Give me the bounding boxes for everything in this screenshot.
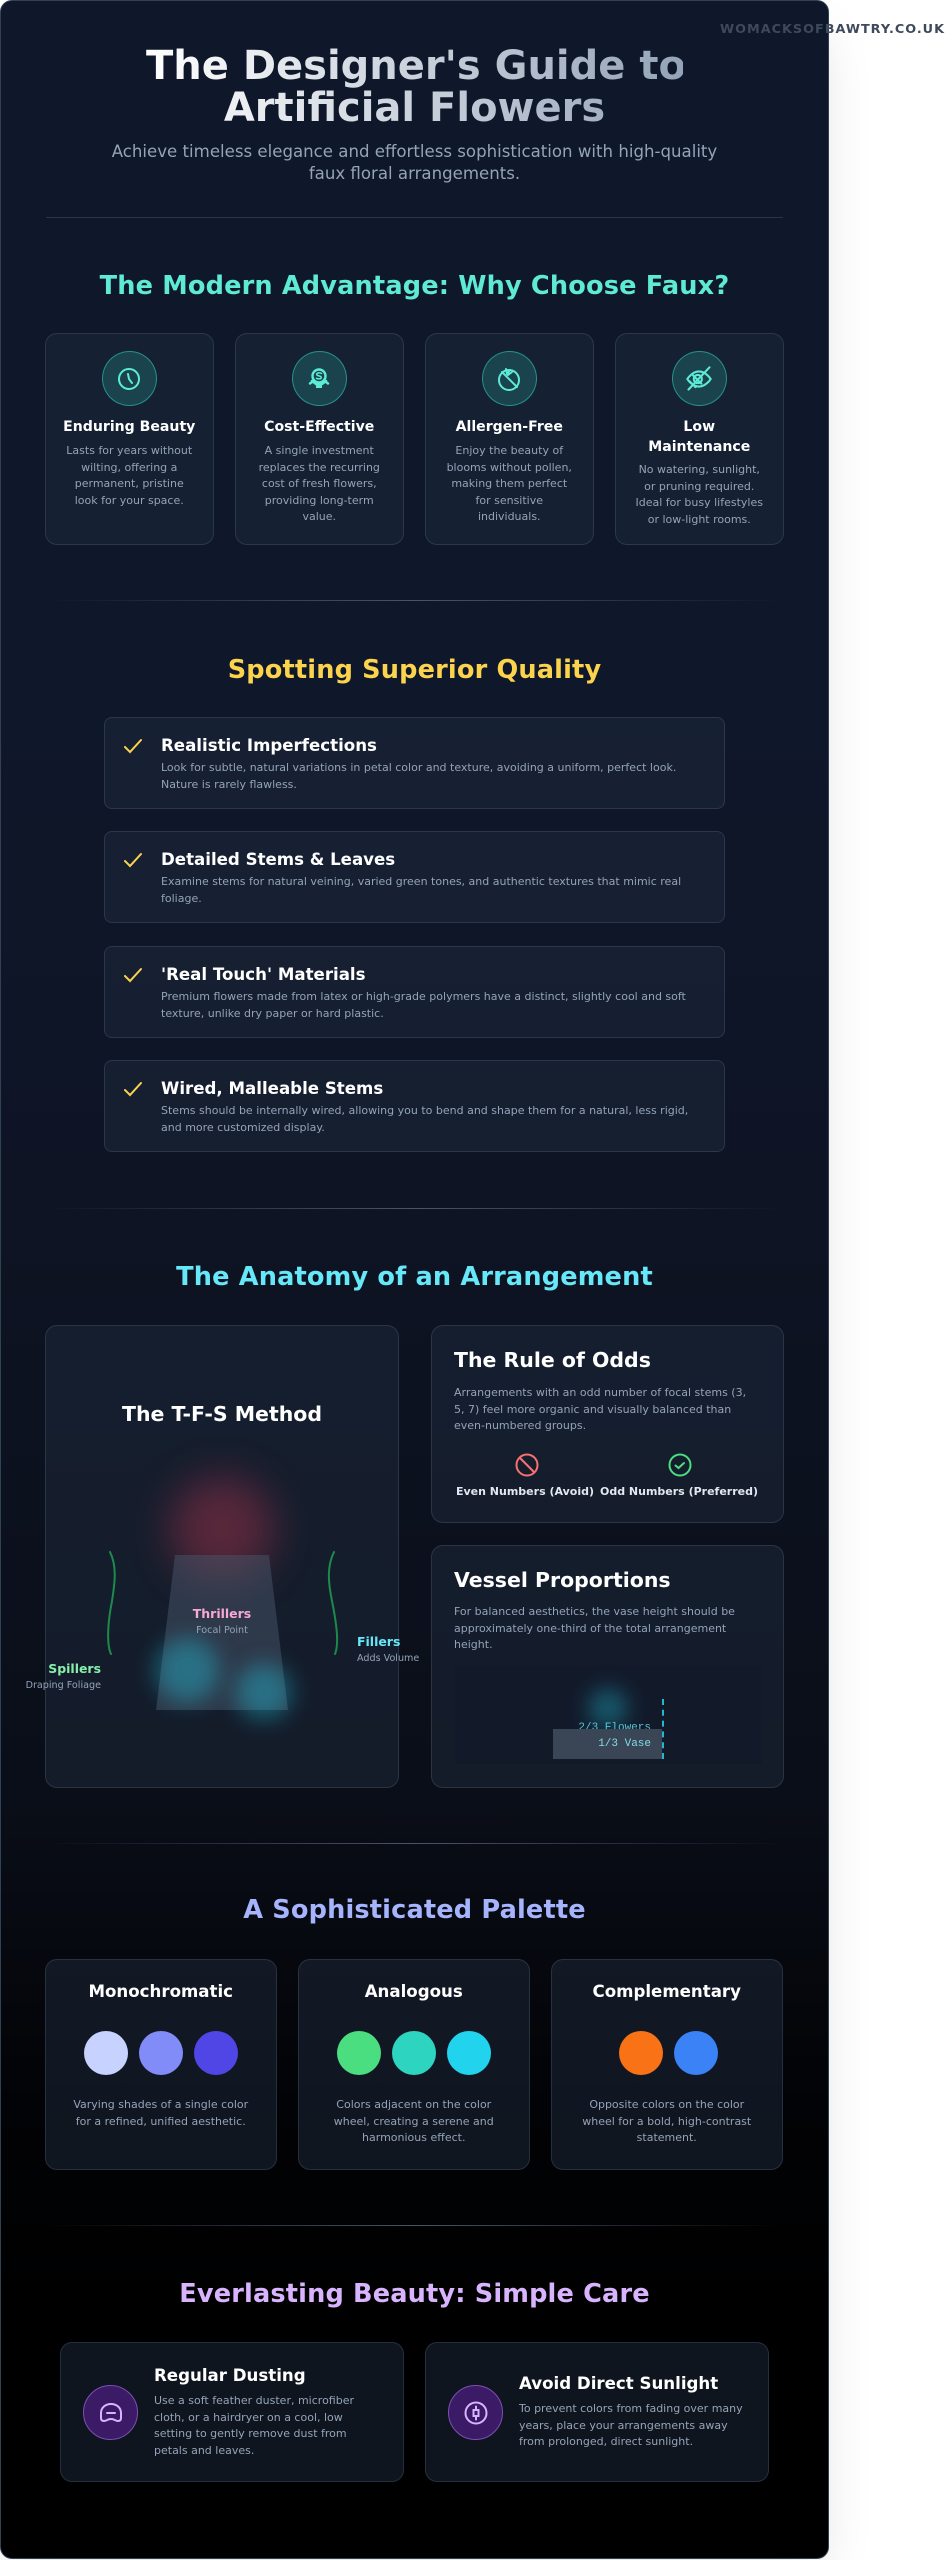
panel: cost-effective	[235, 333, 404, 545]
panel: realistic imperfections	[104, 717, 725, 809]
text	[454, 1605, 735, 1651]
panel: regular dusting: Use a soft feather duster, microfiber	[154, 2394, 354, 2407]
panel: monochromatic: Monochromatic	[88, 1982, 233, 2001]
swatches	[619, 2031, 718, 2075]
heading: anatomy: The Anatomy of an Arrangement	[176, 1262, 653, 1292]
icon: money	[292, 351, 346, 406]
label: spillers: Spillers	[48, 1661, 101, 1676]
panel: allergen-free: making them perfect	[451, 477, 567, 490]
label: odd numbers: Odd Numbers (Preferred)	[600, 1485, 758, 1498]
label: draping foliage: Draping Foliage	[26, 1680, 101, 1691]
panel: complementary: Opposite colors on the color	[589, 2098, 744, 2111]
heading: palette: A Sophisticated Palette	[243, 1895, 586, 1925]
panel: allergen-free	[425, 333, 594, 545]
panel: avoid sunlight: years, place your arrangements away	[519, 2419, 728, 2432]
heading: Vessel Proportions	[454, 1568, 671, 1592]
panel: realistic imperfections: Realistic Imperfections	[161, 736, 377, 755]
panel: enduring beauty: Enduring Beauty	[63, 419, 195, 435]
text: 5, 7) feel more organic and visually balanced than	[454, 1403, 731, 1416]
panel: rule of odds	[431, 1325, 784, 1523]
spiller stems	[107, 1551, 338, 1655]
label: flowers: 2/3 Flowers	[578, 1722, 651, 1734]
panel: low maintenance: or pruning required.	[644, 480, 754, 493]
panel: analogous: wheel, creating a serene and	[334, 2115, 494, 2128]
proportion diagram	[455, 1665, 762, 1764]
panel: monochromatic: Varying shades of a single color	[73, 2098, 248, 2111]
panel: cost-effective: replaces the recurring	[259, 461, 380, 474]
panel: avoid sunlight: To prevent colors from fading over many	[519, 2402, 743, 2415]
icon: avoid	[516, 1454, 538, 1476]
panel: real touch materials: 'Real Touch' Materials	[161, 965, 366, 984]
label: adds volume: Adds Volume	[357, 1653, 419, 1664]
title: The Designer's Guide to	[146, 43, 686, 89]
swatches	[84, 2031, 238, 2075]
text	[454, 1386, 746, 1432]
panel: real touch materials	[104, 946, 725, 1038]
watermark: WOMACKSOFBAWTRY.CO.UK	[720, 22, 945, 37]
panel: monochromatic: for a refined, unified aesthetic.	[76, 2115, 246, 2128]
panel: complementary: wheel for a bold, high-contrast	[582, 2115, 751, 2128]
panel: allergen-free: individuals.	[478, 510, 541, 523]
panel: detailed stems: Examine stems for natural veining, varied green tones, and authentic textures that mimic real	[161, 875, 681, 888]
panel: cost-effective: cost of fresh flowers,	[262, 477, 377, 490]
label: vase: 1/3 Vase	[598, 1738, 651, 1750]
panel: complementary	[551, 1959, 782, 2170]
subtitle: faux floral arrangements.	[309, 164, 520, 183]
panel: wired stems	[104, 1060, 725, 1152]
subtitle	[112, 142, 717, 183]
panel: low maintenance: No watering, sunlight,	[639, 463, 760, 476]
swatches	[337, 2031, 491, 2075]
vase	[156, 1555, 288, 1710]
flower glow	[588, 1688, 628, 1728]
panel: detailed stems: foliage.	[161, 892, 202, 904]
panel: regular dusting: petals and leaves.	[154, 2444, 254, 2457]
panel: vessel proportions	[431, 1545, 784, 1788]
panel: cost-effective: value.	[302, 510, 336, 523]
panel: detailed stems: Detailed Stems & Leaves	[161, 850, 395, 869]
panel: low maintenance: Maintenance	[648, 438, 750, 454]
measure line	[662, 1699, 664, 1759]
panel: regular dusting	[60, 2342, 404, 2482]
panel: real touch materials: Premium flowers made from latex or high-grade polymers have a distinct, slightly cool and soft	[161, 990, 686, 1003]
panel: wired stems: and more customized display.	[161, 1120, 325, 1134]
icon: no pollen	[482, 351, 536, 406]
panel: cost-effective: providing long-term	[265, 494, 374, 507]
panel: allergen-free: blooms without pollen,	[447, 461, 572, 474]
label: thrillers: Thrillers	[193, 1606, 251, 1621]
panel: regular dusting: setting to gently remove dust from	[154, 2427, 347, 2440]
icon: sun	[448, 2385, 503, 2440]
panel: avoid sunlight	[425, 2342, 768, 2482]
heading: The Rule of Odds	[454, 1348, 651, 1372]
panel: monochromatic	[45, 1959, 276, 2170]
panel: regular dusting: cloth, or a hairdryer on a cool, low	[154, 2411, 343, 2424]
panel: analogous: Analogous	[365, 1982, 463, 2001]
icon: check	[124, 968, 142, 982]
panel: realistic imperfections: Look for subtle, natural variations in petal color and texture, avoiding a uniform, perfect look.	[161, 761, 676, 774]
panel: detailed stems	[104, 831, 725, 923]
heading: spotting superior quality: Spotting Superior Quality	[228, 655, 601, 685]
panel: analogous: Colors adjacent on the color	[336, 2098, 491, 2111]
panel: enduring beauty: wilting, offering a	[81, 461, 177, 474]
panel: wired stems: Stems should be internally wired, allowing you to bend and shape them for a natural, less rigid,	[161, 1104, 688, 1117]
icon: check	[124, 1082, 142, 1096]
panel: analogous	[298, 1959, 530, 2170]
panel: real touch materials: texture, unlike dry paper or hard plastic.	[161, 1006, 384, 1020]
panel: T-F-S method	[45, 1325, 399, 1788]
icon: clock	[102, 351, 156, 406]
icon: eye slash	[672, 351, 726, 406]
text: height.	[454, 1638, 493, 1651]
filler glow right	[236, 1664, 292, 1720]
heading: care: Everlasting Beauty: Simple Care	[179, 2279, 650, 2309]
panel: analogous: harmonious effect.	[362, 2131, 465, 2144]
panel: avoid sunlight: Avoid Direct Sunlight	[519, 2374, 718, 2393]
subtitle: Achieve timeless elegance and effortless sophistication with high-quality	[112, 142, 717, 161]
text: For balanced aesthetics, the vase height should be	[454, 1605, 735, 1618]
icon: preferred	[668, 1454, 692, 1476]
panel: cost-effective: Cost-Effective	[264, 419, 374, 435]
panel: complementary: Complementary	[593, 1982, 741, 2001]
text: even-numbered groups.	[454, 1419, 586, 1432]
icon: duster	[83, 2385, 138, 2440]
panel: complementary: statement.	[637, 2131, 697, 2144]
panel: wired stems: Wired, Malleable Stems	[161, 1079, 383, 1098]
title: Artificial Flowers	[224, 85, 605, 131]
panel: low maintenance: or low-light rooms.	[648, 513, 751, 526]
panel: allergen-free: Enjoy the beauty of	[455, 444, 563, 457]
panel: enduring beauty: look for your space.	[75, 494, 184, 507]
panel: low maintenance	[615, 333, 784, 545]
panel: avoid sunlight: from prolonged, direct sunlight.	[519, 2435, 693, 2448]
panel: realistic imperfections: Nature is rarely flawless.	[161, 778, 297, 790]
filler glow left	[155, 1638, 219, 1702]
panel: enduring beauty: permanent, pristine	[75, 477, 184, 490]
heading: modern advantage: The Modern Advantage: Why Choose Faux?	[100, 271, 729, 301]
panel: cost-effective: A single investment	[265, 444, 374, 457]
thrillers glow	[170, 1477, 274, 1581]
text: Arrangements with an odd number of focal stems (3,	[454, 1386, 746, 1399]
panel: allergen-free: for sensitive	[475, 494, 543, 507]
panel: low maintenance: Low	[683, 419, 715, 435]
icon: check	[124, 853, 142, 868]
panel: low maintenance: Ideal for busy lifestyles	[636, 496, 763, 509]
label: focal point: Focal Point	[196, 1625, 248, 1636]
icon: check	[124, 739, 142, 754]
panel: regular dusting: Regular Dusting	[154, 2366, 306, 2385]
title	[146, 46, 683, 129]
vase block	[553, 1729, 662, 1759]
label: even numbers: Even Numbers (Avoid)	[456, 1485, 594, 1498]
panel: enduring beauty: Lasts for years without	[66, 444, 192, 457]
label: fillers: Fillers	[357, 1634, 400, 1649]
panel: allergen-free: Allergen-Free	[456, 419, 563, 435]
panel: enduring beauty	[45, 333, 214, 545]
text: approximately one-third of the total arrangement	[454, 1622, 726, 1635]
heading: T-F-S: The T-F-S Method	[122, 1402, 322, 1426]
